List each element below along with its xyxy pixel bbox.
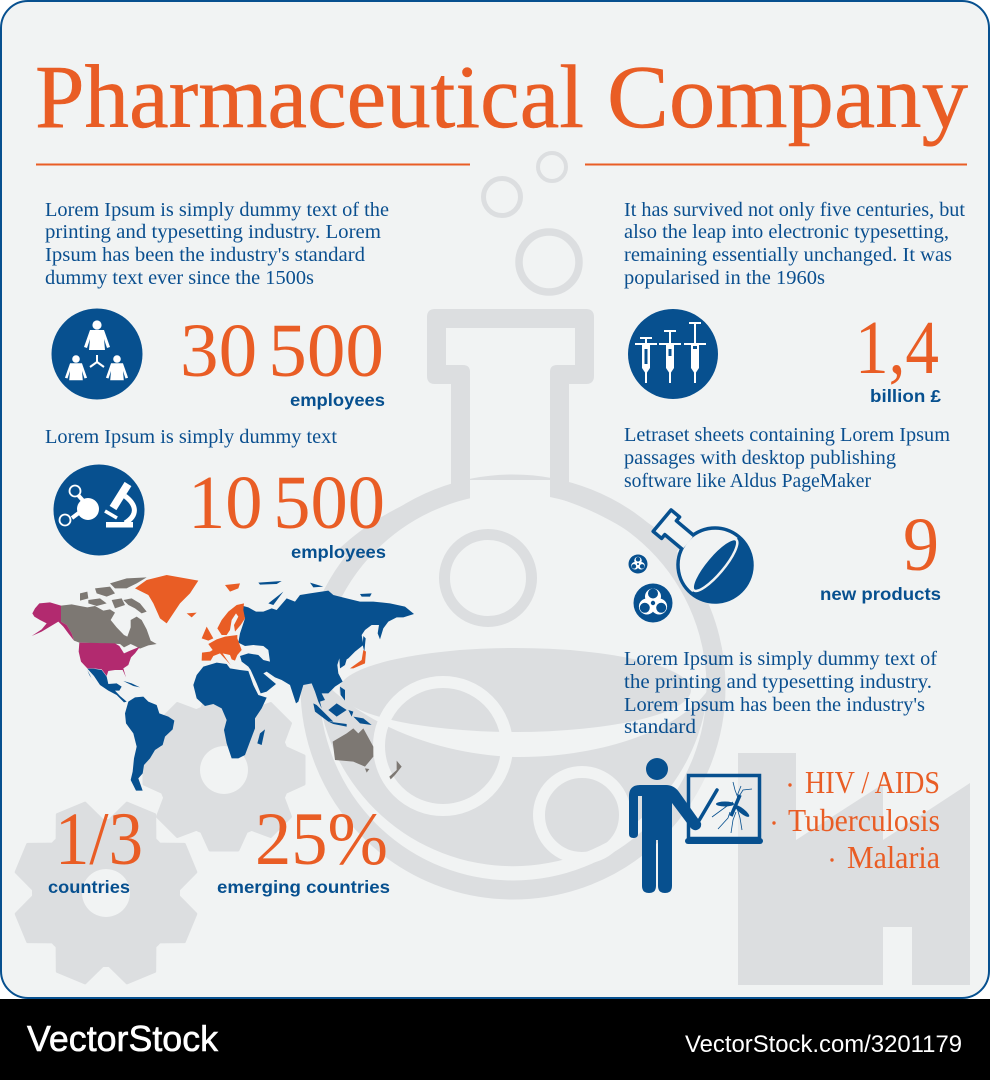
- list: diseases: Tuberculosis: [788, 802, 940, 838]
- text block: intro right: It has survived not only five centuries, but: [624, 200, 966, 221]
- icon: tilted flask: [638, 492, 767, 617]
- text block: typesetting: the printing and typesetting industry.: [624, 672, 932, 693]
- stat: 25% emerging countries: [217, 798, 390, 897]
- text block: intro right: also the leap into electronic typesetting,: [624, 222, 949, 243]
- map region: Oceania: [333, 728, 402, 779]
- title: [35, 48, 968, 147]
- text block: intro right: [624, 200, 966, 289]
- title: Pharmaceutical: [35, 48, 584, 147]
- stat: 9 new products: [820, 503, 941, 604]
- stat: 1/3 countries: 1/3: [55, 798, 143, 881]
- text block: intro right: remaining essentially unchanged. It was: [624, 245, 952, 266]
- background illustration: factory: [738, 753, 970, 985]
- stat: 30 500 employees: employees: [290, 390, 385, 410]
- text block: intro right: popularised in the 1960s: [624, 268, 825, 289]
- icon: people network: [52, 308, 142, 400]
- text block: intro left: dummy text ever since the 1500s: [45, 268, 314, 289]
- text block: intro left: Ipsum has been the industry's standard: [45, 245, 365, 266]
- icon: molecule and microscope: [54, 464, 144, 556]
- background illustration: gear lower: [12, 799, 200, 987]
- footer url: VectorStock.com/3201179: [685, 1031, 962, 1058]
- stat: 10 500 employees: 10 500: [188, 461, 385, 545]
- title rule right: [585, 164, 967, 166]
- stat: 1,4 billion pounds: billion £: [870, 386, 941, 406]
- text block: Letraset: passages with desktop publishing: [624, 448, 896, 469]
- list: diseases: HIV / AIDS: [805, 764, 940, 800]
- footer band: [0, 999, 990, 1080]
- text block: Letraset: [624, 425, 950, 492]
- map region: United States: [32, 602, 140, 677]
- text block: typesetting: [624, 649, 938, 738]
- stat: 9 new products: new products: [820, 584, 941, 604]
- icon: presenter at board with mosquito: [629, 758, 763, 893]
- background illustration: flask: [310, 153, 716, 890]
- text block: short note: Lorem Ipsum is simply dummy text: [45, 427, 338, 448]
- stat: 1,4 billion pounds: 1,4: [855, 306, 939, 390]
- stat: 30 500 employees: 30 500: [180, 309, 384, 393]
- stat: 9 new products: 9: [903, 503, 939, 587]
- icon: biohazard large: [634, 584, 672, 622]
- text block: Letraset: Letraset sheets containing Lorem Ipsum: [624, 425, 950, 446]
- world map: [32, 575, 414, 791]
- map region: emerging markets: [87, 581, 414, 791]
- background illustration: gear upper: [144, 690, 304, 850]
- stat: 25% emerging countries: 25%: [255, 798, 388, 881]
- title: Company: [607, 48, 968, 147]
- text block: intro left: printing and typesetting industry. Lorem: [45, 222, 381, 243]
- map region: Canada: [61, 577, 157, 649]
- icon: biohazard small: [628, 554, 648, 574]
- text block: typesetting: Lorem Ipsum has been the industry's: [624, 695, 925, 716]
- text block: Letraset: software like Aldus PageMaker: [624, 471, 872, 492]
- list: diseases: [772, 764, 940, 875]
- icon: syringes: [628, 309, 718, 399]
- stat: 1/3 countries: countries: [48, 877, 130, 897]
- footer logo: VectorStock: [27, 1018, 219, 1059]
- title rule left: [36, 164, 470, 166]
- text block: typesetting: standard: [624, 717, 696, 738]
- text block: intro left: Lorem Ipsum is simply dummy text of the: [45, 200, 389, 221]
- stat: 10 500 employees: employees: [291, 542, 386, 562]
- map region: Europe, Greenland and Japan: [135, 575, 366, 668]
- text block: intro left: [45, 200, 389, 289]
- list: diseases: Malaria: [847, 839, 940, 875]
- text block: typesetting: Lorem Ipsum is simply dummy text of: [624, 649, 938, 670]
- stat: 25% emerging countries: emerging countries: [217, 877, 390, 897]
